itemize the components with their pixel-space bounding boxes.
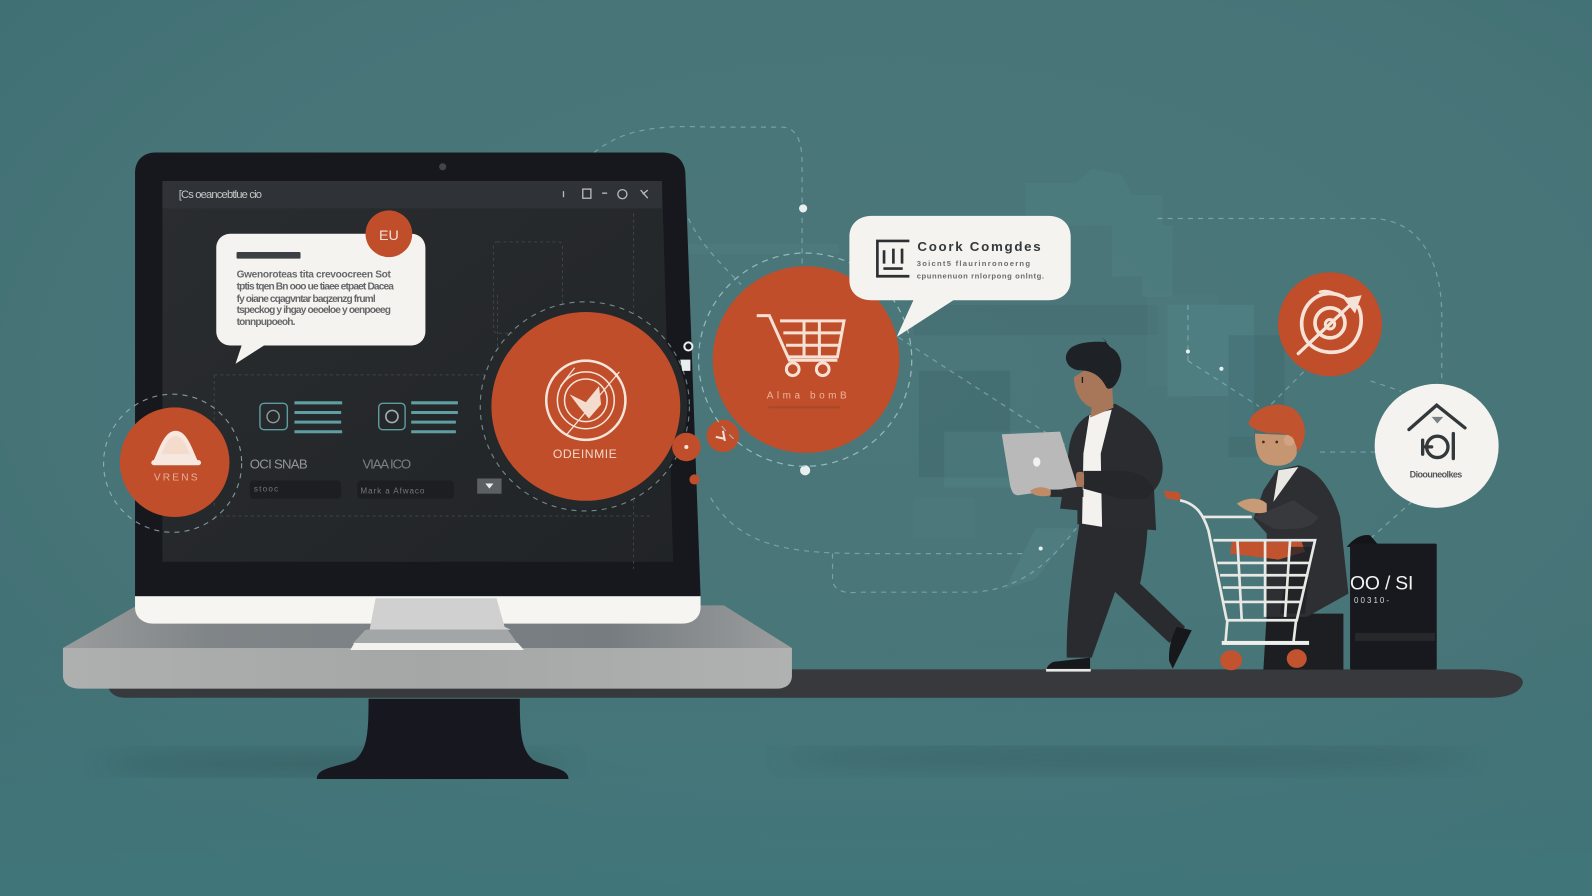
bubble body text: Gwenoroteas tita crevoocreen Sot [237,269,392,280]
icon: cart [757,316,844,376]
jacket [1060,404,1163,530]
icon: target globe [546,361,625,440]
dashboard row 1 [260,403,458,432]
icon: document [877,241,909,276]
body text: 3oicnt5 flaurinronoerng [917,259,1030,268]
node dots [799,204,1223,551]
box sublabel: 00310- [1354,596,1389,605]
disc [491,312,680,501]
bubble body text: tspeckog y ihgay oeoeloe y oenpoeeg [237,305,391,316]
disc [120,407,229,517]
large badge: ordername [480,302,689,511]
background network blocks [686,169,1284,589]
cart base [1222,641,1309,645]
small connector badges [672,342,739,485]
torso [1253,465,1348,617]
collar [1273,467,1298,502]
body text: cpunnenuon rnlorpong onlntg. [917,272,1044,281]
hair [1248,405,1305,452]
label: Dioouneolkes [1410,470,1462,480]
neck and head [1074,367,1113,418]
cart frame [1180,500,1315,643]
dashboard inputs: Mark a Afwaco [360,487,425,496]
gray desk [63,605,792,689]
boy pushing cart [1237,405,1437,670]
icon: target arrow [1298,291,1361,354]
house badge [1375,384,1499,508]
laptop [1002,432,1077,495]
dark platform [109,669,1523,698]
ring stroke [480,302,689,511]
hand [1237,499,1267,513]
trousers [1067,524,1185,658]
cart contents [1230,542,1305,560]
man walking with laptop [1002,337,1192,672]
head [1255,434,1297,466]
ring stroke [104,394,242,532]
monitor body [135,153,701,596]
bubble title bar [237,252,301,259]
arm [1253,500,1318,529]
label: VRENS [154,472,198,483]
speech bubble: cart [849,216,1071,337]
label: ODEINMIE [553,447,617,461]
t-shirt [1082,410,1112,527]
body text [917,259,1044,281]
bubble body text: fy oiane cqagvntar baqzenzg fruml [237,294,376,305]
cart badge [713,266,899,453]
right shoe [1169,627,1192,669]
bubble body text: tptis tqen Bn ooo ue tiaee etpaet Dacea [237,282,394,293]
monitor neck [370,598,511,630]
icon: arrow head [1343,295,1362,314]
hand [1030,487,1051,496]
eye [1082,377,1083,383]
people and cart scene [1002,337,1437,672]
bubble body text: tonnpupoeoh. [237,317,296,328]
legs [1263,614,1343,670]
label: Alma bomB [767,391,847,402]
connector dashed lines [594,127,1442,593]
icon: house [1409,405,1465,459]
sublabel [768,406,840,408]
dashboard item A [260,403,342,432]
dashboard inputs [250,478,502,499]
screen [162,181,673,562]
disc [713,266,899,453]
monitor chin [135,596,701,624]
target badge [1278,272,1382,376]
ear [1284,435,1295,446]
header title: [Cs oeancebtlue cio [179,189,262,201]
webcam [439,163,446,170]
wrist [1076,472,1084,487]
dashboard item B [379,403,458,432]
bubble badge: EU [379,228,399,244]
left shoe [1046,658,1090,671]
jacket forearm [1083,471,1154,499]
wheels [1220,649,1307,670]
monitor [135,153,701,650]
ground shadows [102,749,1472,775]
dashboard labels: VIAA ICO [362,456,411,471]
laptop logo [1033,457,1040,467]
dashboard inputs: stooc [254,485,278,494]
dark halo [482,304,687,509]
icon: hood [151,431,201,465]
left badge: trends [104,394,242,532]
speech bubble: message [216,210,425,364]
dashboard labels: OCI SNAB [250,456,308,471]
box value: OO / SI [1350,574,1413,595]
heading: Coork Comgdes [917,239,1041,254]
left sole [1046,669,1091,672]
bag behind [1347,535,1380,547]
cart ring [699,253,912,466]
monitor base [350,630,524,650]
cart handle [1163,491,1181,500]
monitor stand foot [317,699,569,779]
header icons [563,189,648,199]
hair [1066,337,1121,389]
bubble body text [237,269,394,328]
box [1350,544,1437,670]
dashboard labels [250,456,411,471]
laptop base [1050,490,1083,497]
bubble badge [366,210,412,257]
eyes [1262,441,1278,443]
shopping cart [1163,491,1315,670]
screen header bar [162,181,662,208]
faint screen wireframe [214,213,650,569]
